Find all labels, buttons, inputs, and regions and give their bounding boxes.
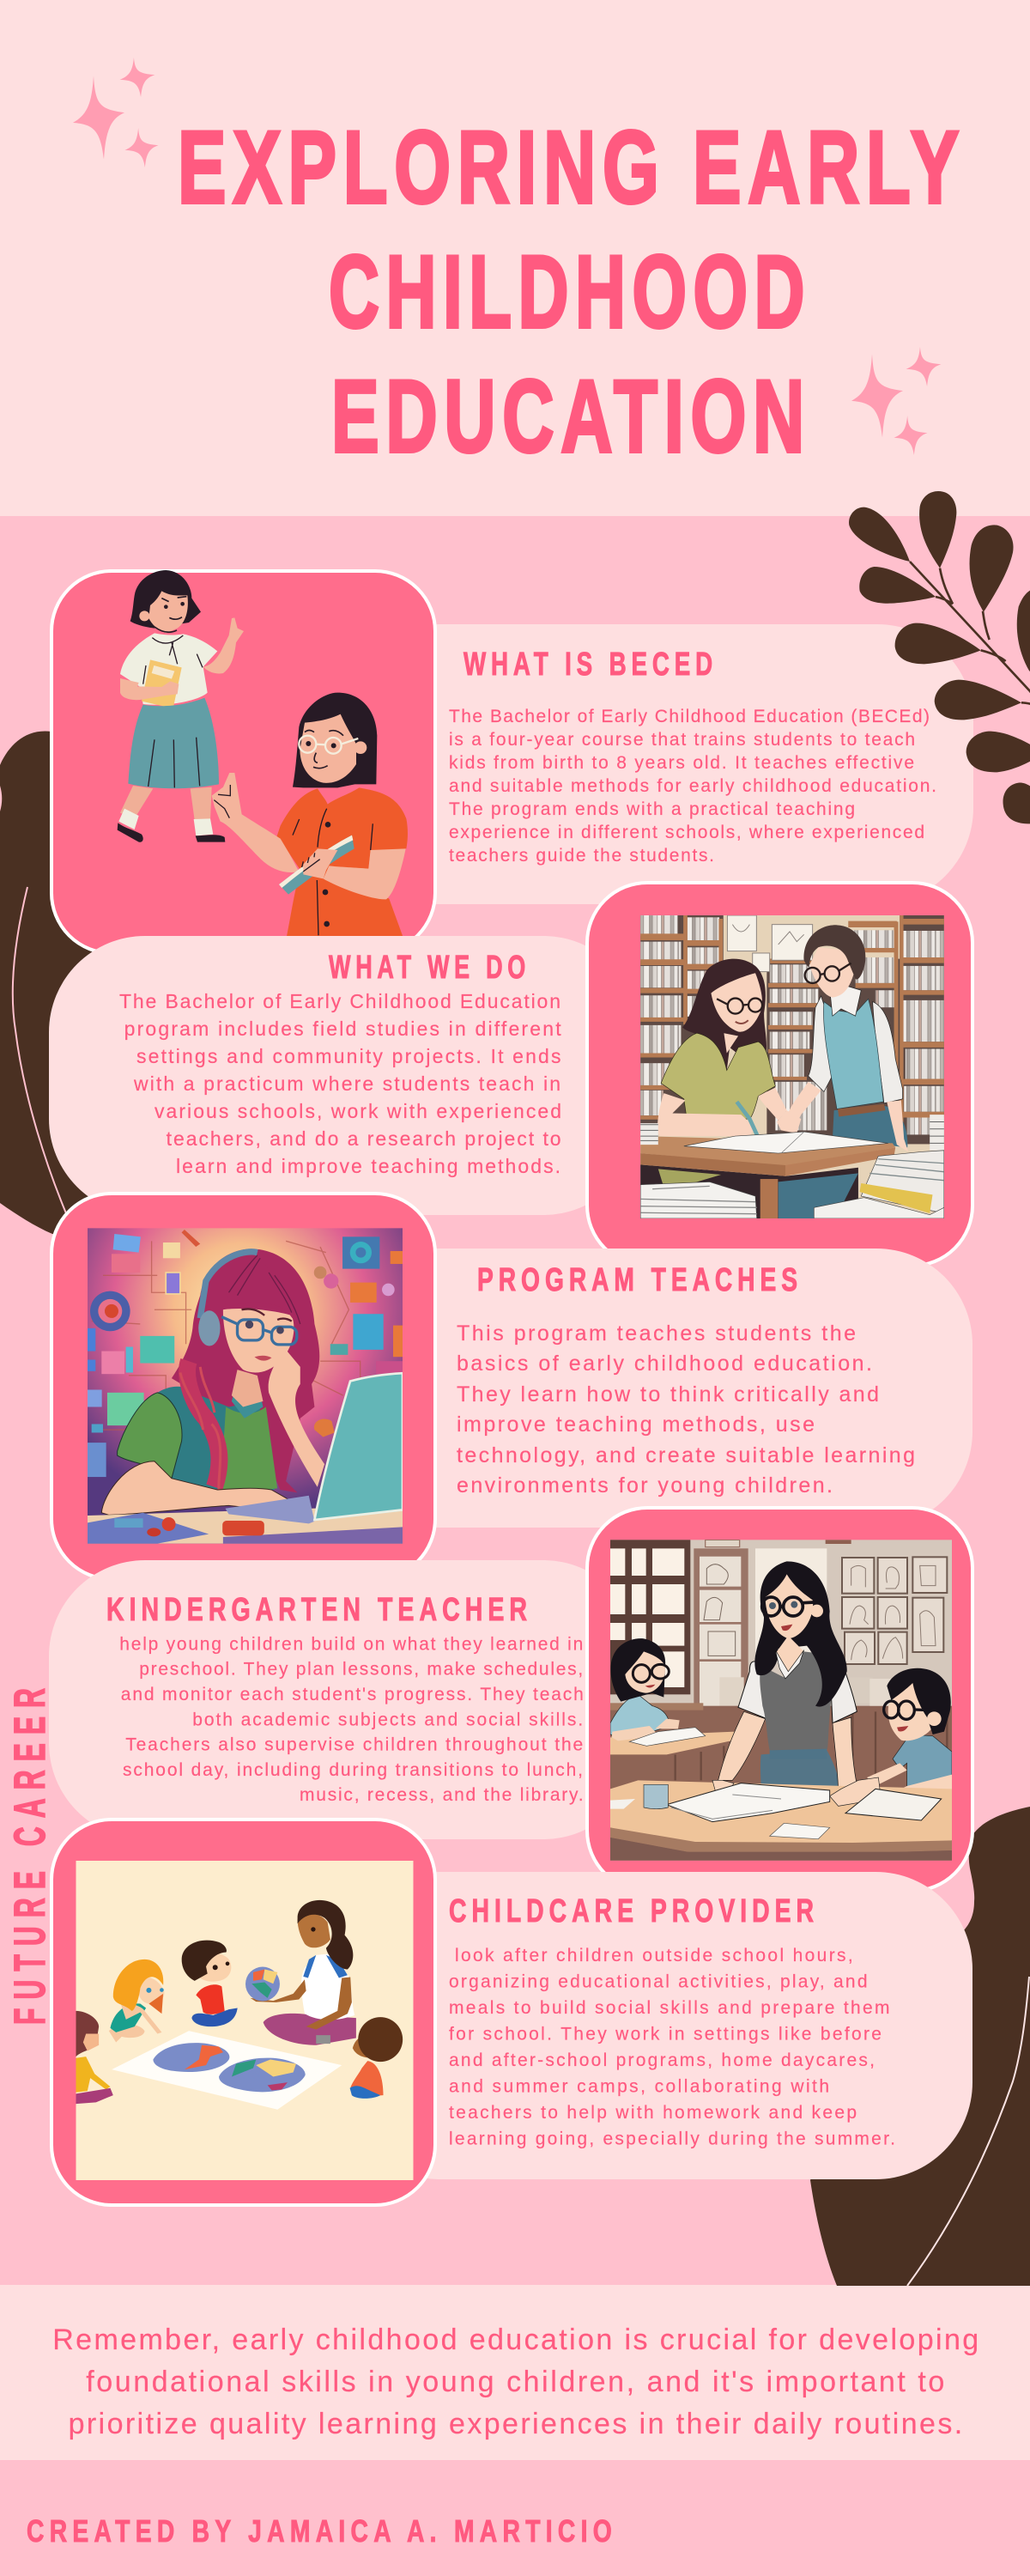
text block: kindergarten teacher: Teachers also supervise children throughout the — [125, 1735, 583, 1755]
decoration: right brown blob — [810, 1807, 1030, 2286]
wall gadgets — [88, 1230, 403, 1477]
text block: childcare provider: teachers to help with homework and keep — [449, 2103, 857, 2123]
text block: what we do: program includes field studies in different — [124, 1018, 561, 1040]
header band — [0, 0, 1030, 516]
panel: illustration of student at laptop — [52, 1194, 435, 1579]
woman in blue vest — [777, 925, 908, 1151]
text block: childcare provider: learning going, especially during the summer. — [449, 2129, 895, 2148]
text block: program teaches: environments for young children. — [457, 1473, 833, 1498]
text block: what is BECEd — [449, 707, 936, 866]
text block: childcare provider: look after children outside school hours, — [455, 1946, 853, 1965]
text block: what is BECEd: The program ends with a practical teaching — [449, 799, 855, 819]
panel: what is BECEd text — [343, 624, 973, 904]
credit line: CREATED BY JAMAICA A. MARTICIO — [27, 2513, 617, 2549]
classroom wall and window — [610, 1540, 952, 1861]
text block: program teaches — [457, 1321, 915, 1498]
text block: what we do: The Bachelor of Early Childhood Education — [119, 990, 560, 1012]
woman in green shirt — [657, 959, 787, 1138]
panel: what we do text — [49, 936, 639, 1215]
heading: what we do: WHAT WE DO — [329, 950, 530, 986]
closing message band background — [0, 2285, 1030, 2460]
blond girl in teal shirt — [109, 1959, 164, 2042]
icon: sparkles top left — [73, 58, 158, 167]
text block: what is BECEd: teachers guide the students. — [449, 846, 714, 866]
world map mat — [112, 2031, 342, 2110]
text block: childcare provider: and summer camps, collaborating with — [449, 2076, 829, 2097]
heading: what is BECEd: WHAT IS BECED — [464, 647, 718, 683]
text block: what is BECEd: kids from birth to 8 years old. It teaches effective — [449, 753, 914, 773]
text block: kindergarten teacher: and monitor each student's progress. They teach — [121, 1685, 584, 1704]
text block: kindergarten teacher: both academic subjects and social skills. — [192, 1710, 583, 1729]
teacher in grey vest — [718, 1561, 858, 1795]
girl with red hair — [101, 1249, 324, 1515]
side label: future career: FUTURE CAREER — [5, 1680, 54, 2025]
teacher holding globe — [251, 1900, 356, 2045]
text block: what is BECEd: The Bachelor of Early Childhood Education (BECEd) — [449, 707, 930, 726]
right pupil — [867, 1668, 952, 1795]
text block: childcare provider: organizing educational activities, play, and — [449, 1971, 867, 1992]
text block: program teaches: They learn how to think critically and — [457, 1382, 879, 1406]
text block: what we do: learn and improve teaching methods. — [176, 1155, 560, 1177]
wall posters — [727, 915, 813, 972]
text block: program teaches: technology, and create suitable learning — [457, 1443, 915, 1467]
heading: program teaches: PROGRAM TEACHES — [477, 1262, 803, 1298]
closing message: Remember, early childhood education is crucial for developing — [52, 2324, 978, 2356]
boy in red shirt — [182, 1941, 238, 2026]
heading: childcare provider: CHILDCARE PROVIDER — [449, 1893, 819, 1929]
text block: kindergarten teacher: school day, including during transitions to lunch, — [123, 1760, 583, 1780]
text block: kindergarten teacher: music, recess, and the library. — [300, 1785, 584, 1805]
text block: program teaches: basics of early childhood education. — [457, 1352, 872, 1376]
text block: kindergarten teacher: help young children build on what they learned in — [119, 1634, 583, 1654]
closing message: prioritize quality learning experiences in their daily routines. — [69, 2408, 962, 2440]
text block: what is BECEd: and suitable methods for early childhood education. — [449, 776, 936, 796]
panel: kindergarten teacher text — [49, 1560, 639, 1839]
decoration: top right leaf branch — [849, 491, 1030, 823]
globe — [245, 1967, 280, 2002]
panel: illustration of two women in library — [587, 883, 972, 1266]
closing message — [52, 2324, 978, 2440]
text block: program teaches: improve teaching methods, use — [457, 1413, 815, 1437]
text block: program teaches: This program teaches students the — [457, 1321, 856, 1346]
desk and laptop — [88, 1373, 403, 1544]
panel: illustration of children around a map — [52, 1820, 435, 2205]
bookshelves — [640, 915, 944, 1144]
text block: what we do: settings and community projects. It ends — [136, 1045, 561, 1067]
text block: childcare provider — [449, 1946, 895, 2148]
text block: childcare provider: for school. They work in settings like before — [449, 2025, 882, 2044]
title: EDUCATION — [331, 359, 811, 474]
text block: what is BECEd: is a four-year course that trains students to teach — [449, 730, 915, 750]
child with curly hair at right — [350, 2017, 403, 2099]
title — [178, 110, 966, 474]
title: CHILDHOOD — [329, 234, 811, 349]
text block: childcare provider: meals to build social skills and prepare them — [449, 1998, 889, 2018]
left pupil — [610, 1638, 736, 1754]
teacher — [212, 693, 408, 937]
table, books and cup — [610, 1777, 952, 1861]
panel: illustration of girl and teacher — [52, 570, 435, 953]
text block: what we do: with a practicum where students teach in — [133, 1072, 560, 1095]
table and papers — [640, 1115, 944, 1218]
text block: childcare provider: and after-school programs, home daycares, — [449, 2050, 875, 2070]
decoration: left brown blob — [0, 731, 103, 1234]
heading: kindergarten teacher: KINDERGARTEN TEACHER — [106, 1592, 532, 1628]
text block: what is BECEd: experience in different schools, where experienced — [449, 823, 924, 842]
text block: what we do: teachers, and do a research project to — [167, 1127, 561, 1150]
text block: kindergarten teacher — [119, 1634, 584, 1805]
girl — [118, 570, 244, 842]
text block: what we do — [119, 990, 561, 1177]
panel: childcare provider text — [343, 1872, 972, 2179]
text block: what we do: various schools, work with experienced — [154, 1100, 561, 1122]
panel: illustration of teacher with two pupils — [587, 1508, 972, 1891]
icon: sparkles bottom right — [851, 347, 941, 455]
child at left edge — [76, 2011, 113, 2104]
closing message: foundational skills in young children, and it's important to — [86, 2366, 944, 2398]
text block: kindergarten teacher: preschool. They plan lessons, make schedules, — [139, 1660, 583, 1680]
panel: program teaches text — [343, 1249, 972, 1528]
